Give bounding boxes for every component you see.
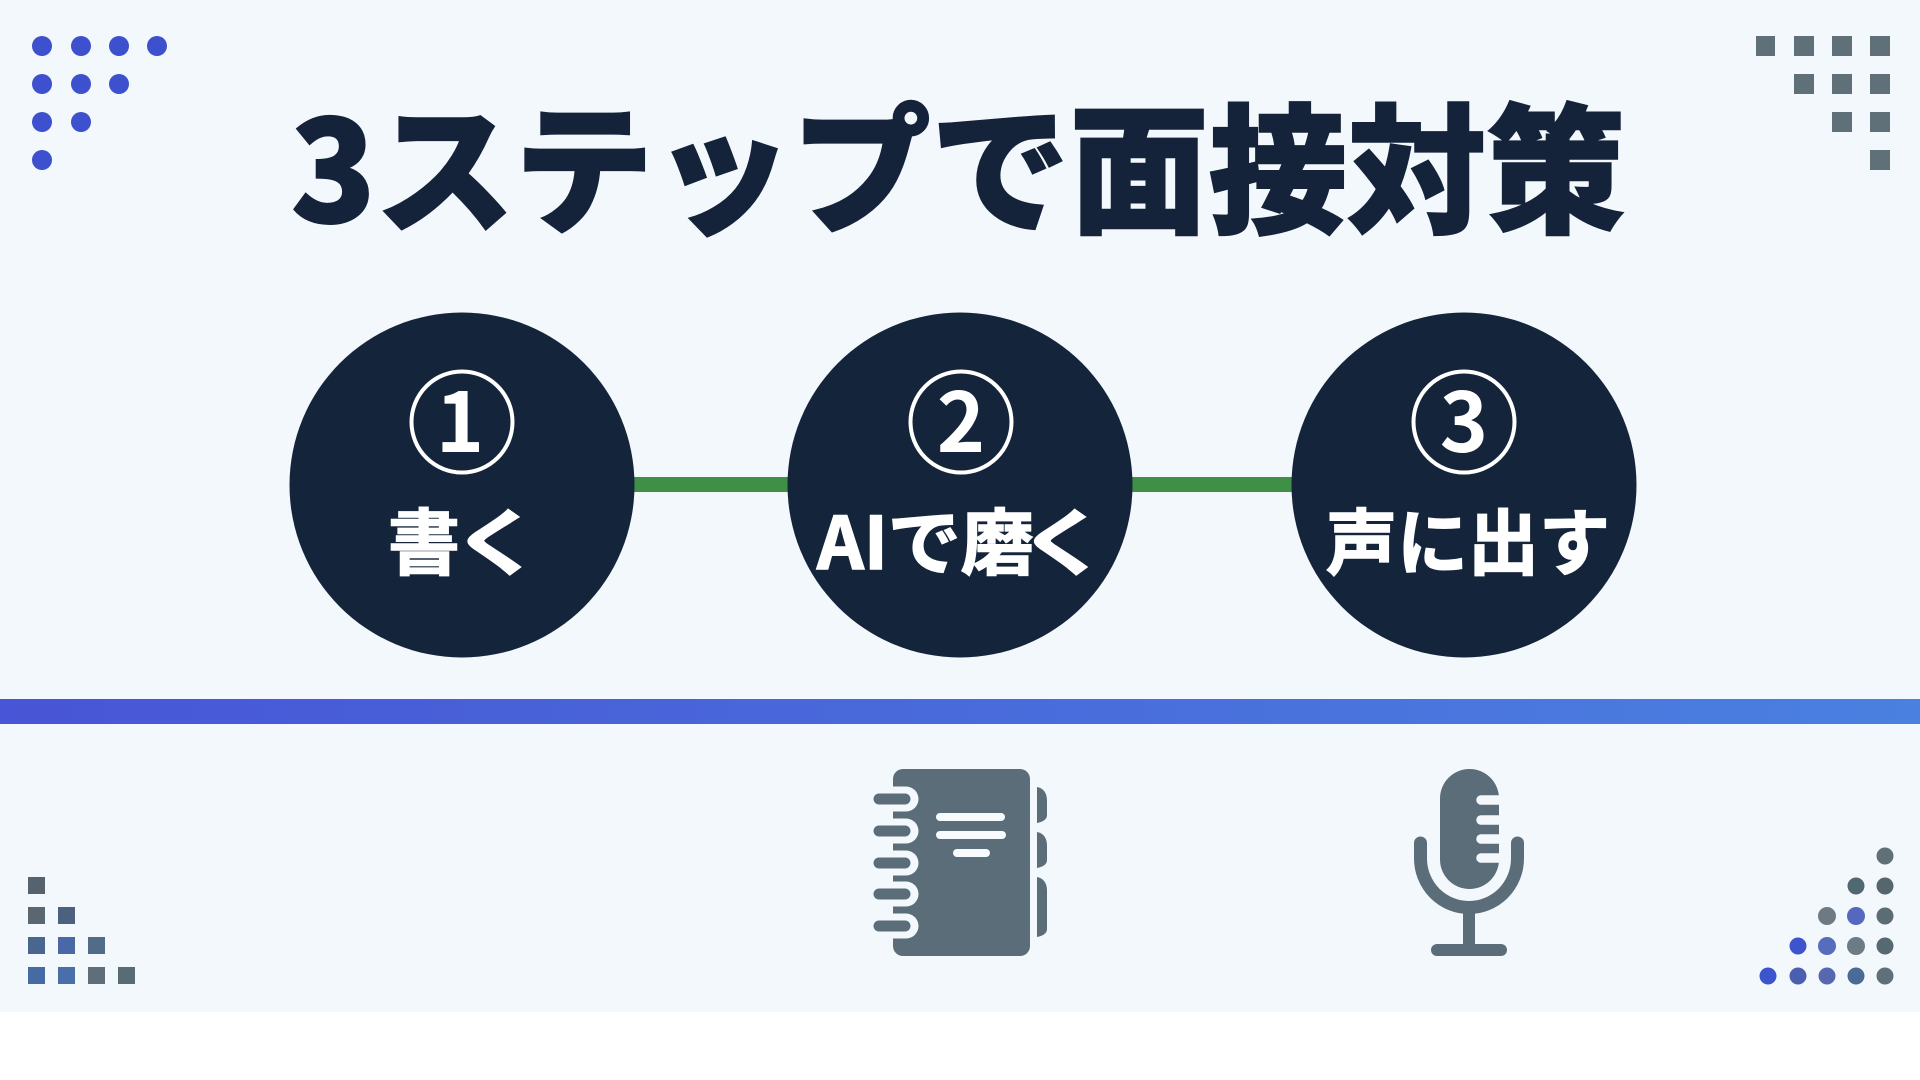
decoration: bottom-right dots	[1760, 848, 1894, 984]
step 2 circle	[788, 312, 1132, 658]
step 2 circle: AIで磨	[816, 485, 1034, 590]
step 1 circle	[290, 312, 634, 658]
connector: step 2 to step 3	[1125, 477, 1300, 492]
step 1 circle: 1	[436, 357, 484, 476]
step 1 circle: く	[452, 485, 543, 590]
decoration: bottom-left squares	[28, 877, 135, 984]
icon: microphone	[1420, 769, 1518, 952]
step 3 circle: 声に出す	[1326, 485, 1610, 590]
title: 3ステップで面接対策	[291, 61, 1625, 263]
step 2 circle: 2	[937, 357, 985, 476]
step 2 circle: く	[1019, 485, 1109, 590]
connector: step 1 to step 2	[630, 477, 795, 492]
step 3 circle: 3	[1440, 357, 1488, 476]
icon: notebook	[873, 769, 1047, 956]
divider band	[0, 699, 1920, 724]
decoration: top-left dots	[32, 36, 167, 170]
step 3 circle	[1292, 312, 1636, 658]
decoration: top-right squares	[1756, 36, 1890, 170]
step 1 circle: 書	[388, 485, 460, 590]
